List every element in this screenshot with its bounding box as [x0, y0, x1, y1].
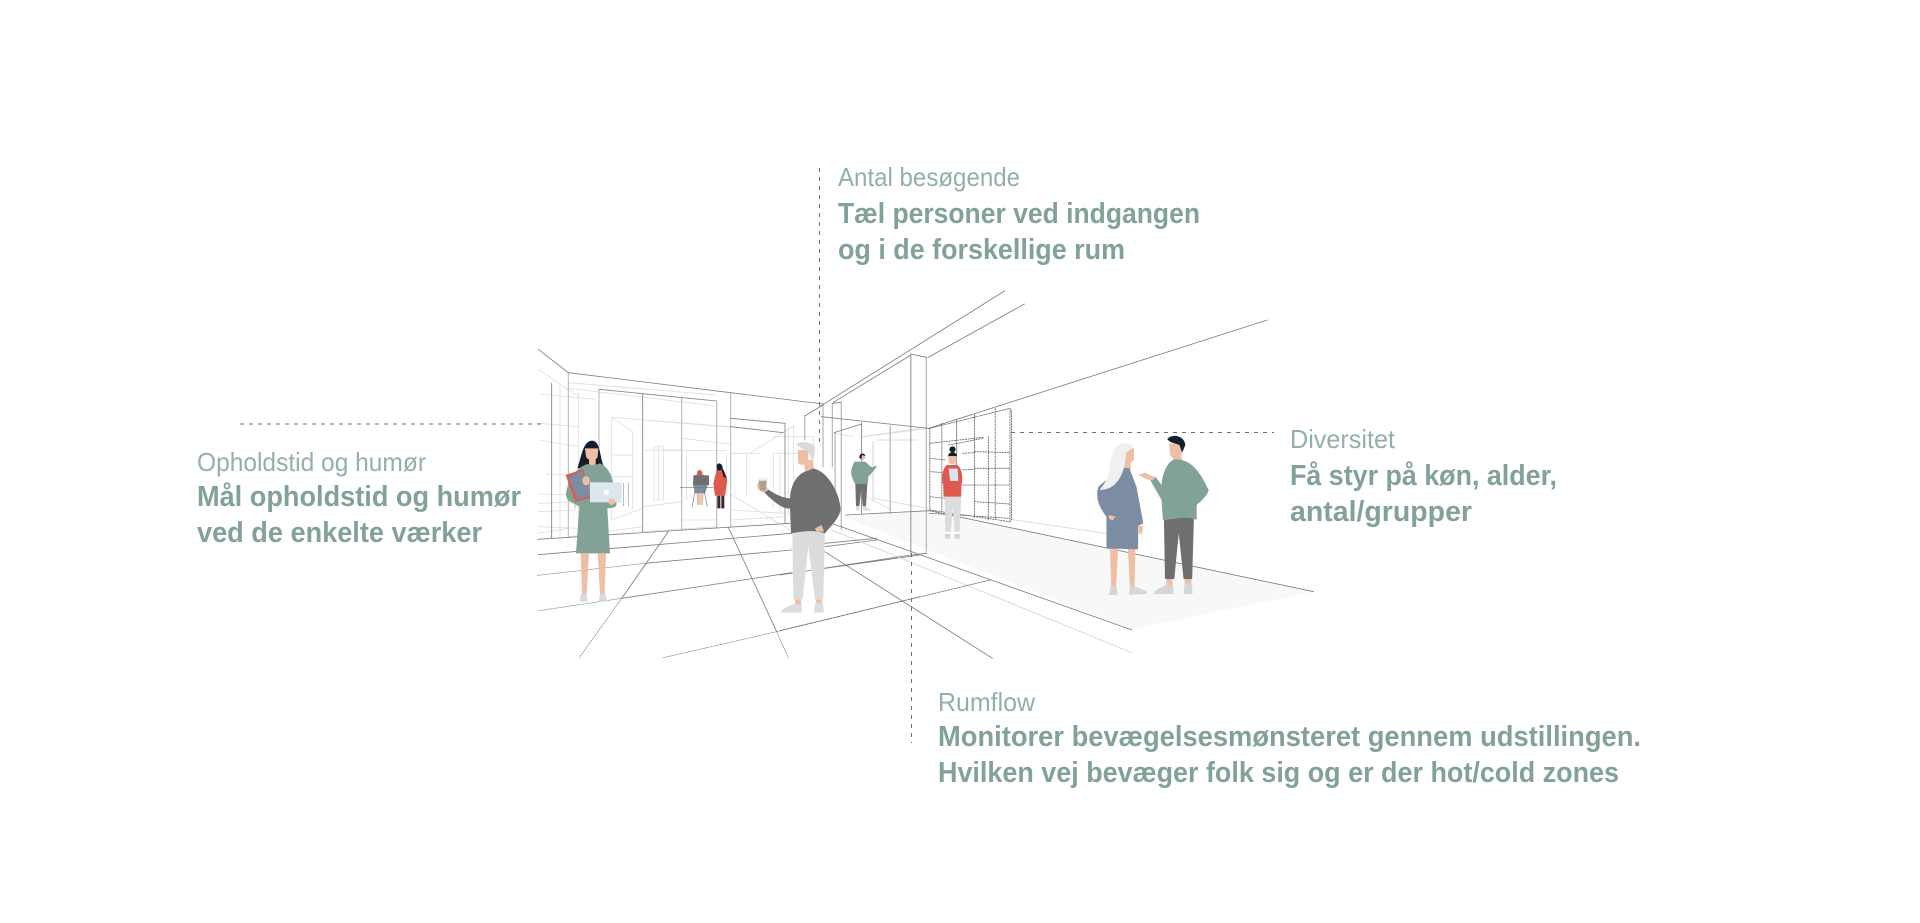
description: og i de forskellige rum	[838, 234, 1125, 266]
description: antal/grupper	[1290, 496, 1472, 528]
person: woman in red coat	[713, 463, 727, 508]
description	[1290, 460, 1557, 528]
description	[197, 481, 521, 549]
label: Rumflow	[938, 687, 1035, 717]
person: seated visitor at laptop	[680, 470, 713, 507]
text block: diversitet	[1290, 424, 1557, 528]
text block: opholdstid og humør	[197, 447, 521, 549]
text block: rumflow	[938, 687, 1641, 789]
label: Opholdstid og humør	[197, 447, 426, 477]
description: Hvilken vej bevæger folk sig og er der hot/cold zones	[938, 757, 1619, 789]
dotted shelving	[780, 408, 1011, 631]
label: Diversitet	[1290, 424, 1396, 454]
dashed connector: diversitet	[1011, 432, 1274, 434]
person: man in green sweater talking	[1138, 436, 1209, 594]
person: grey-haired man with coffee cup	[757, 442, 841, 613]
room illustration: right hall wireframe and floor	[780, 291, 1314, 658]
person: woman with laptop and folder	[566, 441, 622, 602]
description: Tæl personer ved indgangen	[838, 198, 1200, 230]
dashed connector: opholdstid	[240, 423, 541, 425]
person: woman in red top with tablet	[942, 446, 962, 539]
label: Antal besøgende	[838, 162, 1020, 192]
text block: antal besøgende	[838, 162, 1200, 266]
description: ved de enkelte værker	[197, 517, 482, 549]
description	[938, 721, 1641, 789]
room illustration: left gallery wireframe	[537, 349, 920, 658]
description: Monitorer bevægelsesmønsteret gennem udstillingen.	[938, 721, 1641, 753]
grey floor area	[842, 511, 1314, 629]
dashed connector: rumflow	[910, 553, 912, 743]
person: man in green sweater in back room	[851, 454, 877, 511]
description	[838, 198, 1200, 266]
description: Få styr på køn, alder,	[1290, 460, 1557, 492]
description: Mål opholdstid og humør	[197, 481, 521, 513]
person: woman with long white hair in blue dress	[1097, 443, 1147, 595]
dashed connector: antal besøgende	[818, 168, 820, 443]
